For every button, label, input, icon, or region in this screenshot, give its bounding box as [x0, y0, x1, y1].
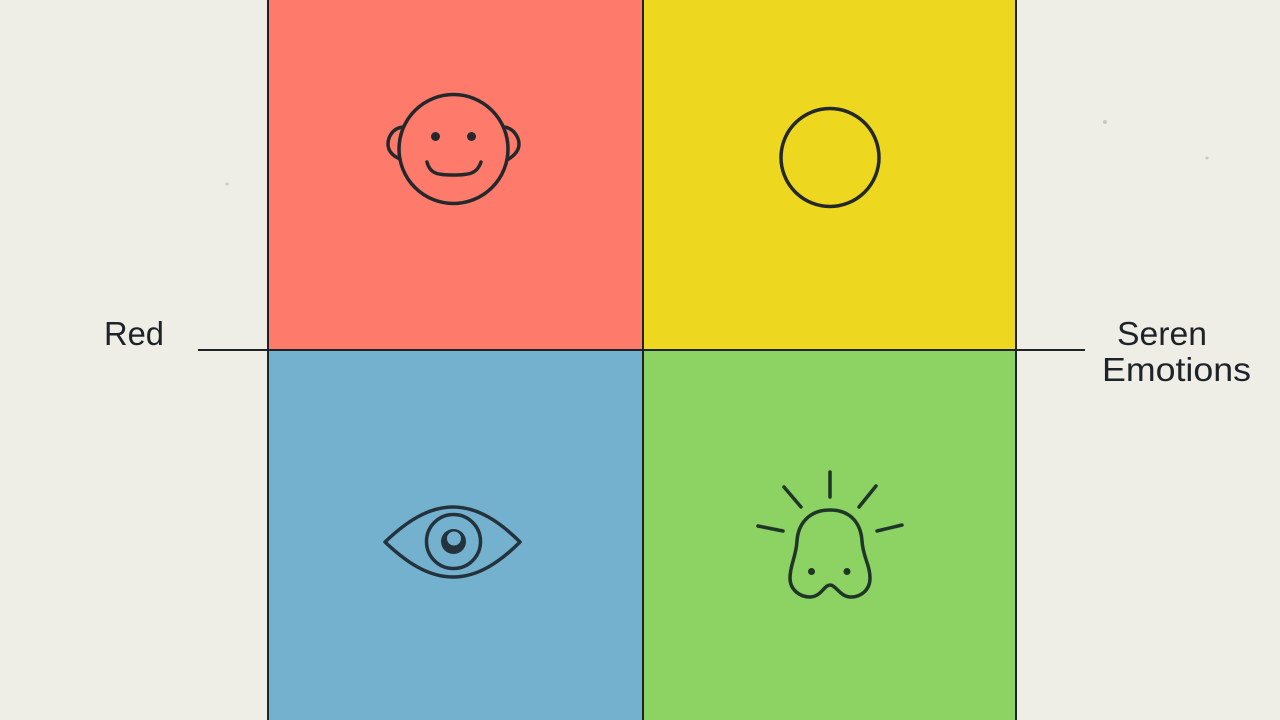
- icon: bulb-shaped nose with rays: [758, 472, 902, 597]
- label: Seren Emotions: Emotions: [1102, 351, 1251, 388]
- icon: circle: [781, 108, 879, 206]
- label: Red: Red: [104, 315, 164, 352]
- icon: eye: [385, 507, 520, 577]
- label: Seren Emotions: Seren: [1117, 315, 1207, 352]
- panel: yellow quadrant: [643, 0, 1016, 350]
- label: Seren Emotions: [1102, 315, 1251, 388]
- panel: blue quadrant: [268, 350, 643, 720]
- panel: red quadrant: [268, 0, 643, 350]
- icon: smiling face: [388, 94, 519, 204]
- panel: green quadrant: [643, 350, 1016, 720]
